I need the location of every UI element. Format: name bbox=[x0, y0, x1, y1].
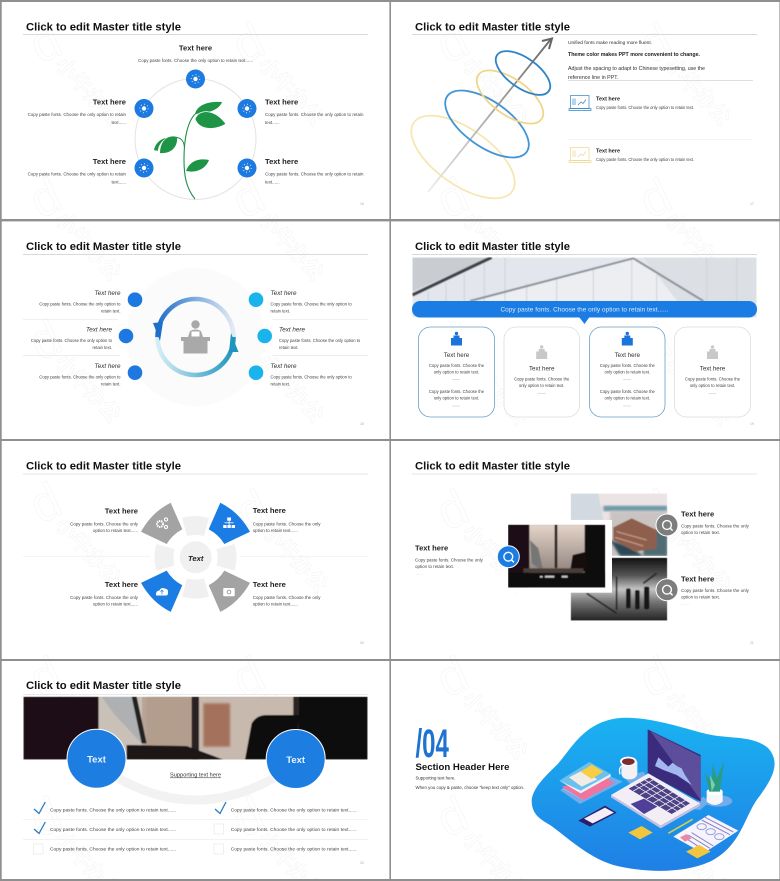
text block: lower left: Copy paste fonts. Choose the only option to retain bbox=[28, 172, 127, 176]
heading: slide 19 title: Click to edit Master title style bbox=[415, 241, 570, 253]
heading: slide 16 title: Click to edit Master title style bbox=[26, 22, 181, 34]
icon: report sheet bbox=[673, 815, 738, 858]
text block: upper right: text...... bbox=[265, 120, 280, 125]
card 3: only option to retain text. bbox=[604, 396, 650, 400]
watermark background: 小牛办公 bbox=[660, 53, 735, 130]
card 4: Copy paste fonts. Choose the bbox=[685, 377, 741, 382]
text block: left three bbox=[39, 363, 121, 386]
watermark background: 小牛办公 bbox=[253, 208, 328, 285]
circle: right: Text bbox=[286, 755, 306, 766]
watermark background: d bbox=[631, 646, 680, 708]
checklist text bbox=[50, 808, 357, 853]
watermark background: 小牛办公 bbox=[253, 687, 328, 764]
panel: slide 16 plant cycle bbox=[23, 22, 368, 206]
card 3 bbox=[590, 327, 665, 417]
text block: left three: retain text. bbox=[101, 382, 120, 386]
photo: hands on laptop bbox=[571, 493, 667, 556]
text block: right top: —— —— bbox=[681, 540, 690, 542]
icon: sun top bbox=[186, 70, 205, 88]
callout band bbox=[412, 301, 757, 324]
page number 22: 22 bbox=[360, 861, 364, 865]
checklist text: Copy paste fonts. Choose the only option to retain text...... bbox=[50, 808, 176, 814]
text block: top right: option to retain text...... bbox=[253, 528, 298, 533]
pale background disc bbox=[126, 268, 264, 406]
text block: item two: Copy paste fonts. Choose the only option to retain text. bbox=[596, 157, 694, 162]
watermark background: 小牛办公 bbox=[457, 208, 532, 285]
icon: plant bbox=[154, 102, 226, 199]
text block: top right bbox=[253, 506, 321, 533]
callout band: Copy paste fonts. Choose the only option to retain text...... bbox=[500, 306, 669, 314]
icon: grey presenter bbox=[536, 345, 547, 359]
text block: item one: Copy paste fonts. Choose the only option to retain text. bbox=[596, 105, 694, 110]
text block: top left: option to retain text...... bbox=[93, 528, 138, 533]
text block: item two: Text here bbox=[596, 148, 620, 154]
icon: blue presenter two bbox=[622, 332, 633, 346]
card 1: only option to retain text. bbox=[434, 396, 479, 400]
cycle arrows bbox=[153, 299, 238, 375]
text block: left two bbox=[31, 326, 113, 350]
icon: grey search badge two bbox=[656, 579, 678, 601]
watermark background: 小牛办公 bbox=[660, 208, 735, 285]
watermark background: d bbox=[21, 309, 70, 371]
icon: sun upper left bbox=[134, 99, 154, 118]
panel: slide 17 rings and arrow bbox=[398, 22, 757, 214]
panel: slide 18 presenter cycle bbox=[23, 241, 368, 426]
panel: slide 20 pinwheel bbox=[23, 460, 368, 645]
watermark background: 小牛办公 bbox=[257, 520, 332, 597]
text block: lower right: Copy paste fonts. Choose the only option to retain bbox=[265, 172, 364, 176]
text block: right top bbox=[681, 510, 750, 542]
text block: right two: retain text. bbox=[279, 345, 299, 350]
page number 19: 19 bbox=[750, 422, 754, 426]
text block: right two bbox=[279, 326, 361, 350]
text block: intro: reference line in PPT. bbox=[568, 75, 618, 81]
watermark background: d bbox=[428, 167, 477, 229]
text block: left three: Copy paste fonts. Choose the only option to bbox=[39, 374, 121, 380]
text block: left: Copy paste fonts. Choose the only bbox=[415, 558, 484, 562]
card 1: Copy paste fonts. Choose the bbox=[429, 363, 485, 368]
text block: lower right bbox=[265, 157, 364, 184]
card 3: Copy paste fonts. Choose the bbox=[600, 389, 656, 394]
icon: plant pot bbox=[705, 762, 724, 805]
text block: top left: Text here bbox=[105, 506, 138, 515]
panel: slide 19 four cards bbox=[412, 241, 757, 426]
text block: right bottom: Text here bbox=[681, 574, 714, 583]
text block: bottom left: Text here bbox=[105, 580, 138, 589]
text block: right two: Copy paste fonts. Choose the only option to bbox=[279, 338, 361, 343]
watermark background: 小牛办公 bbox=[660, 520, 735, 597]
text block: intro: Theme color makes PPT more convenient to change. bbox=[568, 52, 701, 58]
page number 16: 16 bbox=[360, 202, 364, 206]
text block: lower right: text...... bbox=[265, 180, 280, 184]
card 3: only option to retain text. bbox=[604, 370, 650, 374]
text block: section support: When you copy & paste, choose "keep text only" option. bbox=[416, 785, 524, 790]
watermark background: d bbox=[428, 312, 477, 374]
card 3: Copy paste fonts. Choose the bbox=[600, 363, 656, 368]
text block: left bbox=[415, 544, 484, 576]
ring diagram bbox=[398, 38, 557, 214]
icon: yellow laptop chart bbox=[569, 148, 591, 162]
text block: right top: Copy paste fonts. Choose the only bbox=[681, 524, 750, 528]
pale shadows under objects bbox=[560, 772, 732, 810]
text block: left three: Text here bbox=[94, 363, 121, 370]
text block: upper right: Text here bbox=[265, 98, 298, 106]
sector: bottom left with cloud bbox=[141, 571, 182, 612]
centre label: Text bbox=[188, 554, 204, 563]
text block: section support bbox=[416, 776, 524, 790]
watermark background: d bbox=[631, 12, 680, 74]
card 1: Copy paste fonts. Choose the bbox=[429, 389, 485, 394]
icon: sun upper right bbox=[238, 99, 256, 118]
text block: right three bbox=[270, 363, 352, 386]
watermark background: d bbox=[21, 646, 70, 708]
illustration: blue blob with desk bbox=[532, 718, 775, 871]
text block: right one bbox=[270, 290, 352, 314]
heading: slide 18 title: Click to edit Master title style bbox=[26, 241, 181, 253]
text block: lower left: Text here bbox=[93, 157, 126, 166]
text block: top: Text here bbox=[179, 44, 212, 52]
watermark background: d bbox=[224, 786, 273, 848]
watermark background: 小牛办公 bbox=[50, 53, 125, 130]
card 2: Copy paste fonts. Choose the bbox=[514, 377, 570, 382]
text block: item one bbox=[596, 96, 694, 110]
watermark background: d bbox=[631, 167, 680, 229]
text block: top right: Copy paste fonts. Choose the only bbox=[253, 522, 321, 526]
watermark background: d bbox=[428, 786, 477, 848]
icon: laptop bbox=[611, 729, 701, 828]
watermark background: d bbox=[631, 786, 680, 848]
photo: silhouettes by window bbox=[571, 558, 667, 621]
heading: slide 17 title: Click to edit Master title style bbox=[415, 22, 570, 34]
text block: left one: Copy paste fonts. Choose the only option to bbox=[39, 302, 121, 306]
text block: upper left: Text here bbox=[93, 98, 126, 106]
sector: top right with hierarchy bbox=[209, 503, 250, 544]
text block: intro: Unified fonts make reading more fluent. bbox=[568, 40, 652, 46]
text block: intro bbox=[568, 40, 705, 81]
text block: upper left: text...... bbox=[111, 120, 126, 125]
card 1: Text here bbox=[444, 352, 470, 359]
text block: right three: Copy paste fonts. Choose the only option to bbox=[270, 374, 352, 380]
card 2: Text here bbox=[529, 366, 555, 372]
checklist text: Copy paste fonts. Choose the only option to retain text...... bbox=[231, 847, 357, 853]
text block: lower left bbox=[28, 157, 127, 184]
text block: upper right: Copy paste fonts. Choose the only option to retain bbox=[265, 112, 364, 117]
icon: presenter at desk bbox=[181, 320, 210, 354]
watermark background: 小牛办公 bbox=[50, 513, 125, 590]
page number 21: 21 bbox=[750, 641, 754, 645]
text block: top bbox=[138, 44, 253, 63]
watermark background: d bbox=[224, 646, 273, 708]
photo: office desk bbox=[508, 525, 605, 588]
text block: right top: option to retain text. bbox=[681, 530, 720, 535]
icon: phone bbox=[578, 806, 617, 827]
text block: top: Copy paste fonts. Choose the only option to retain text...... bbox=[138, 58, 253, 63]
icon: pen bbox=[668, 819, 693, 833]
text block: bottom right bbox=[253, 580, 321, 606]
sector: top left with gears bbox=[141, 503, 182, 544]
watermark background: d bbox=[21, 786, 70, 848]
text block: top right: Text here bbox=[253, 506, 286, 515]
text block: left two: Text here bbox=[86, 326, 112, 334]
text block: right three: retain text. bbox=[270, 382, 290, 386]
text block: right bottom: Copy paste fonts. Choose the only bbox=[681, 588, 750, 593]
inner ring segments bbox=[154, 516, 236, 598]
right markers bbox=[249, 292, 272, 380]
text block: upper right bbox=[265, 98, 364, 125]
watermark background: d bbox=[631, 312, 680, 374]
text block: left one bbox=[39, 290, 121, 314]
icon: grey presenter two bbox=[707, 345, 718, 359]
icon: blue search badge bbox=[497, 546, 519, 568]
text block: right three: Text here bbox=[270, 363, 297, 370]
watermark background: 小牛办公 bbox=[253, 350, 328, 427]
text block: right bottom: option to retain text. bbox=[681, 594, 720, 600]
text block: right bottom bbox=[681, 574, 750, 606]
watermark background: 小牛办公 bbox=[660, 353, 735, 430]
card 4 bbox=[674, 327, 750, 417]
watermark background: 小牛办公 bbox=[50, 350, 125, 427]
ring around the plant bbox=[135, 78, 256, 200]
watermark background: 小牛办公 bbox=[253, 53, 328, 130]
watermark background: d bbox=[428, 12, 477, 74]
photo frame bbox=[501, 520, 612, 593]
text block: upper left: Copy paste fonts. Choose the only option to retain bbox=[28, 112, 127, 117]
text block: right one: retain text. bbox=[270, 308, 290, 314]
checklist marks bbox=[34, 802, 226, 834]
card 4: Text here bbox=[700, 366, 726, 372]
text block: bottom right: Text here bbox=[253, 580, 286, 589]
icon: sun lower right bbox=[238, 158, 256, 178]
text block: left two: retain text. bbox=[92, 345, 112, 350]
watermark background: d bbox=[428, 646, 477, 708]
heading: slide 22 title: Click to edit Master title style bbox=[26, 680, 181, 692]
arrow head bbox=[542, 38, 552, 49]
icon: grey search badge one bbox=[656, 514, 678, 536]
text block: bottom right: option to retain text...... bbox=[253, 602, 298, 606]
circle: left: Text bbox=[87, 754, 107, 766]
watermark background: 小牛办公 bbox=[457, 53, 532, 130]
text block: left two: Copy paste fonts. Choose the only option to bbox=[31, 338, 113, 343]
text block: right one: Copy paste fonts. Choose the only option to bbox=[270, 302, 352, 306]
card 1: only option to retain text. bbox=[434, 370, 479, 374]
icon: books bbox=[559, 762, 614, 800]
left markers bbox=[119, 292, 142, 380]
watermark background: 小牛办公 bbox=[457, 353, 532, 430]
card 1 bbox=[418, 327, 494, 417]
watermark background: d bbox=[224, 12, 273, 74]
card 4: only option to retain text. bbox=[690, 383, 735, 388]
checklist text: Copy paste fonts. Choose the only option to retain text...... bbox=[50, 827, 176, 833]
watermark background: 小牛办公 bbox=[50, 687, 125, 764]
card 2: only option to retain text. bbox=[519, 383, 565, 388]
page number 17: 17 bbox=[750, 202, 754, 206]
text block: lower right: Text here bbox=[265, 157, 298, 166]
page number 20: 20 bbox=[360, 641, 364, 645]
card 3: Text here bbox=[615, 352, 641, 359]
watermark background: 小牛办公 bbox=[457, 520, 532, 597]
text block: bottom left bbox=[70, 580, 139, 606]
text block: bottom left: option to retain text...... bbox=[93, 602, 138, 606]
text block: left: Text here bbox=[415, 544, 448, 552]
watermark background: d bbox=[21, 167, 70, 229]
watermark background: d bbox=[21, 472, 70, 534]
page number 18: 18 bbox=[360, 422, 364, 426]
checklist text: Copy paste fonts. Choose the only option to retain text...... bbox=[50, 847, 176, 853]
text block: lower left: text...... bbox=[111, 180, 126, 184]
text block: item one: Text here bbox=[596, 96, 620, 102]
checklist empty boxes bbox=[34, 824, 224, 854]
text block: right two: Text here bbox=[279, 326, 306, 334]
icon: mug bbox=[619, 757, 637, 779]
section number: /04 bbox=[416, 721, 449, 765]
watermark background: 小牛办公 bbox=[457, 687, 532, 764]
panel: section header bbox=[416, 718, 775, 871]
text block: left one: retain text. bbox=[101, 308, 120, 314]
text block: right bottom: —— —— bbox=[681, 604, 690, 606]
watermark background: d bbox=[428, 479, 477, 541]
icon: sticky notes bbox=[628, 826, 653, 839]
icon: blue laptop chart bbox=[569, 96, 591, 110]
text block: intro: Adjust the spacing to adapt to Chinese typesetting, use the bbox=[568, 66, 705, 72]
text block: top left: Copy paste fonts. Choose the only bbox=[70, 522, 139, 526]
text block: upper left bbox=[28, 98, 127, 125]
watermark background: 小牛办公 bbox=[660, 687, 735, 764]
text block: bottom right: Copy paste fonts. Choose the only bbox=[253, 595, 321, 600]
card 2 bbox=[504, 327, 580, 417]
watermark background: 小牛办公 bbox=[50, 208, 125, 285]
text block: bottom left: Copy paste fonts. Choose the only bbox=[70, 595, 139, 600]
panel: slide 22 checklist bbox=[23, 680, 368, 865]
circle: left bbox=[67, 729, 126, 788]
text block: item two bbox=[596, 148, 694, 162]
text block: left: option to retain text. bbox=[415, 564, 454, 569]
heading: slide 21 title: Click to edit Master title style bbox=[415, 460, 570, 472]
watermark background: d bbox=[224, 309, 273, 371]
circle: right bbox=[266, 730, 325, 788]
text block: left one: Text here bbox=[94, 290, 121, 297]
text block: section support: Supporting text here. bbox=[416, 776, 456, 781]
sector: bottom right with camera bbox=[209, 571, 250, 612]
checklist text: Copy paste fonts. Choose the only option to retain text...... bbox=[231, 827, 357, 833]
watermark background: d bbox=[631, 479, 680, 541]
icon: blue presenter bbox=[451, 332, 462, 346]
checklist text: Copy paste fonts. Choose the only option to retain text...... bbox=[231, 808, 357, 814]
supporting arc bbox=[118, 778, 274, 800]
text block: left: —— —— bbox=[415, 574, 424, 576]
photo: office banner bbox=[23, 697, 368, 760]
photo: building roof bbox=[412, 257, 757, 317]
icon: sun lower left bbox=[134, 158, 154, 178]
text block: right one: Text here bbox=[270, 290, 297, 297]
panel: slide 21 photo collage bbox=[412, 460, 757, 645]
heading: slide 20 title: Click to edit Master title style bbox=[26, 460, 181, 472]
watermark background: d bbox=[228, 479, 277, 541]
heading: section header: Section Header Here bbox=[416, 762, 510, 773]
watermark background: d bbox=[224, 167, 273, 229]
text block: right top: Text here bbox=[681, 510, 714, 519]
watermark background: d bbox=[21, 12, 70, 74]
supporting text: Supporting text here bbox=[170, 772, 221, 778]
text block: top left bbox=[70, 506, 139, 533]
